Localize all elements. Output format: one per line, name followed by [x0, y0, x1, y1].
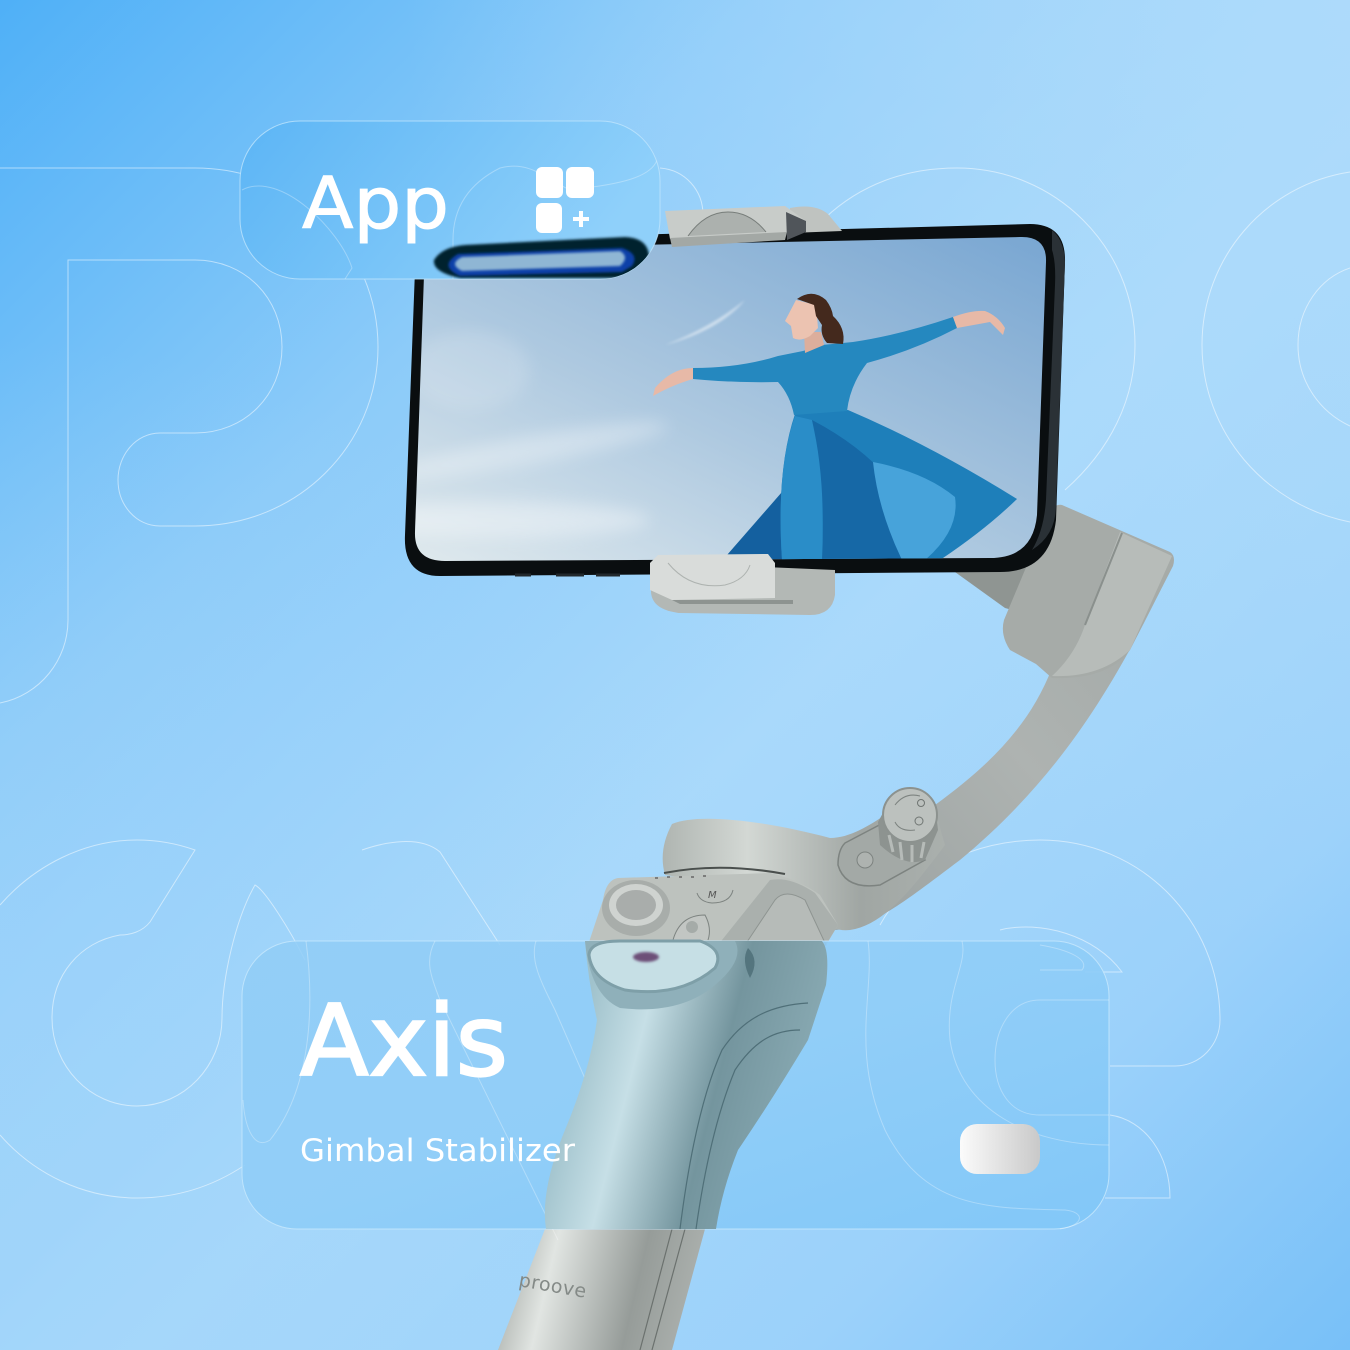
side slot	[745, 948, 755, 978]
card glass	[242, 941, 1109, 1229]
dress back flap	[727, 492, 785, 560]
phone edge seen through glass	[434, 237, 649, 278]
wheel recess	[838, 822, 925, 886]
gimbal arm	[588, 505, 1174, 945]
phone screen	[414, 237, 1046, 561]
right hand	[953, 311, 1005, 335]
arm connector	[955, 565, 1030, 612]
neck shadow	[664, 868, 785, 874]
face	[785, 300, 818, 340]
phone	[350, 220, 1065, 576]
arm shoulder hump	[663, 810, 945, 930]
card: App	[240, 121, 660, 279]
knob	[878, 788, 938, 862]
brand mark: proove	[517, 1269, 588, 1303]
title: Axis: Axis	[300, 985, 508, 1099]
bottom phone clamp	[650, 554, 835, 615]
panel side face	[718, 879, 838, 945]
status dots	[655, 876, 706, 878]
outline lettering: Proove	[0, 168, 1350, 1198]
refracted lines	[242, 160, 657, 279]
hair	[797, 294, 844, 344]
left hand	[653, 368, 693, 396]
card: Axis	[242, 941, 1109, 1240]
handle top control panel	[588, 873, 838, 945]
motor block	[1003, 505, 1174, 678]
phone side frame	[1032, 230, 1065, 550]
torso and arms	[693, 317, 957, 415]
thumb panel	[589, 941, 718, 992]
dancer	[653, 294, 1017, 560]
white pill button	[960, 1124, 1040, 1174]
neck	[804, 332, 824, 353]
phone body	[405, 224, 1065, 576]
card glass	[240, 121, 660, 279]
M button: M	[708, 890, 717, 901]
icon: app grid with plus	[536, 167, 594, 233]
small button	[857, 852, 873, 868]
clouds	[415, 302, 743, 538]
grip seam	[680, 1003, 808, 1229]
handle lower grip below card	[498, 1229, 705, 1350]
M button	[697, 890, 733, 903]
title: App: App	[302, 162, 449, 245]
dress skirt	[781, 410, 1017, 560]
rainbow spot	[633, 952, 659, 962]
handle through glass	[545, 941, 827, 1229]
dress shadow fold	[812, 420, 902, 560]
thumb surround	[585, 941, 738, 1009]
refracted lines	[243, 941, 1109, 1240]
subtitle: Gimbal Stabilizer	[300, 1133, 575, 1169]
joystick	[602, 880, 670, 936]
dress left panel	[781, 416, 823, 560]
shutter button	[673, 915, 709, 940]
curved arm	[830, 540, 1172, 930]
top phone clamp	[665, 206, 842, 247]
phone side buttons	[515, 574, 620, 576]
dress light fold	[873, 462, 956, 560]
